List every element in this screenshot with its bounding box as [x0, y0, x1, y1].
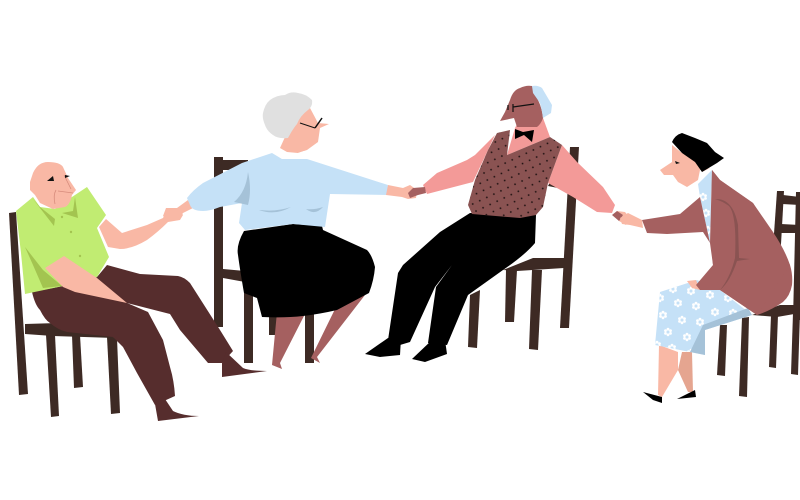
arm right hand — [386, 185, 417, 199]
shirt — [16, 187, 109, 294]
glasses — [300, 123, 315, 128]
shoes — [365, 338, 447, 362]
arm: reaching — [99, 208, 183, 249]
blouse shadows — [234, 172, 323, 212]
front leg — [658, 345, 678, 397]
arm: resting — [45, 256, 127, 303]
scarf flowers — [700, 192, 710, 234]
hand on lap — [687, 280, 700, 290]
eye — [675, 161, 680, 164]
skirt — [238, 224, 375, 317]
skirt flowers — [655, 286, 737, 352]
hair — [263, 92, 312, 138]
vest — [468, 130, 562, 218]
shoes — [643, 390, 696, 403]
illustration: four seniors on chairs holding hands — [9, 86, 800, 421]
back leg — [678, 352, 693, 392]
dress skirt — [655, 280, 752, 355]
hair — [672, 133, 724, 172]
bow tie — [515, 129, 534, 142]
jacket shadows — [715, 199, 750, 290]
shirt arms — [423, 135, 615, 213]
chair: man in green shirt — [9, 212, 120, 417]
shoes — [155, 352, 267, 421]
skirt shadow — [690, 308, 752, 355]
person: woman in brown jacket — [620, 133, 792, 403]
trousers — [32, 265, 233, 405]
trousers — [388, 213, 536, 345]
hand: left — [163, 200, 193, 221]
chair: man in dotted vest — [468, 147, 579, 350]
chair: woman in brown jacket — [717, 191, 800, 397]
cuffs and hand — [408, 187, 630, 225]
legs — [272, 295, 365, 369]
jacket — [642, 170, 792, 315]
neck and face — [280, 108, 329, 153]
head — [30, 162, 76, 209]
eyes — [47, 176, 54, 181]
glasses — [508, 104, 534, 112]
collar — [272, 149, 307, 159]
person: woman in blue blouse — [163, 92, 417, 369]
chair: woman in blue blouse — [214, 157, 314, 363]
hair — [532, 86, 552, 118]
person: man in dotted vest — [365, 86, 630, 362]
scarf — [698, 170, 712, 243]
neck — [507, 118, 550, 155]
jacket body fill near arm — [711, 170, 790, 315]
blouse — [187, 153, 388, 230]
head — [500, 86, 543, 127]
shirt shadow and collar — [25, 197, 81, 288]
face lines — [54, 175, 73, 204]
person: man in green shirt — [16, 162, 267, 421]
reaching hand — [620, 213, 643, 228]
neck and face — [660, 145, 710, 187]
